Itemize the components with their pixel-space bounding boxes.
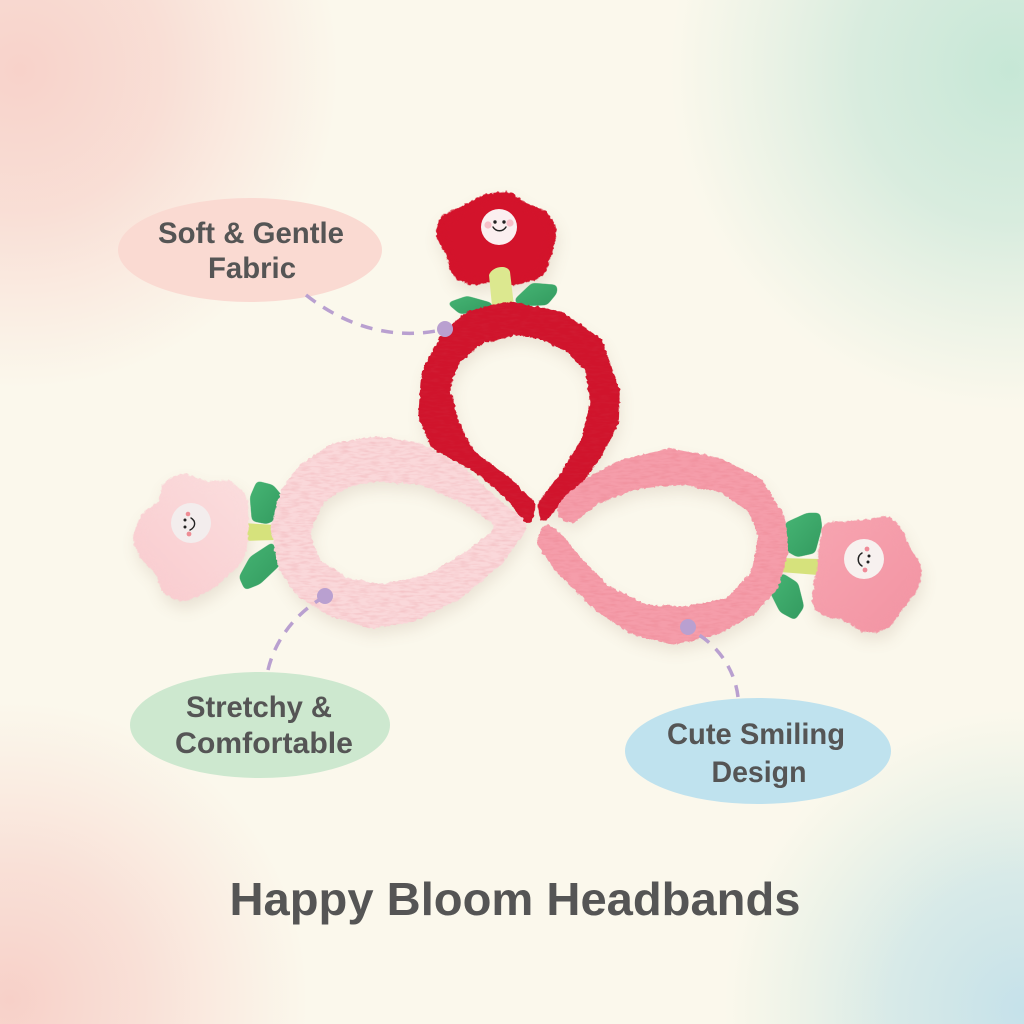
headband: salmon pink (right): [538, 450, 787, 643]
pink label text: Soft & Gentle: [158, 217, 344, 250]
red stem: [489, 267, 514, 306]
blue label pill: [625, 698, 891, 804]
flower: light pink with smiling face: [133, 473, 283, 602]
light pink stem: [242, 523, 276, 541]
headband: light pink (left): [272, 438, 525, 627]
pink connector dot: [437, 321, 453, 337]
title: Happy Bloom Headbands: [230, 873, 800, 925]
flower: red with smiling face: [436, 192, 557, 314]
salmon leaves: [770, 513, 822, 620]
pink label pill: [118, 198, 382, 302]
soft shadows under headbands: [135, 200, 924, 651]
green connector: [268, 600, 319, 670]
salmon stem: [780, 558, 820, 575]
green label text: Stretchy &: [186, 691, 332, 724]
flower: salmon pink with smiling face: [770, 513, 922, 632]
pink connector: [306, 295, 436, 333]
light pink petals: [133, 473, 248, 602]
headband: red (top): [420, 303, 618, 522]
blue connector: [694, 632, 738, 697]
blue connector dot: [680, 619, 696, 635]
blue label text: Design: [712, 756, 806, 789]
red face: [481, 209, 517, 245]
green connector dot: [317, 588, 333, 604]
green label text: Comfortable: [175, 727, 353, 760]
green label pill: [130, 672, 390, 778]
salmon face: [844, 539, 884, 579]
callout: stretchy and comfortable: [130, 588, 390, 778]
light pink face: [171, 503, 211, 543]
callout: soft and gentle fabric: [118, 198, 453, 337]
pink label text: Fabric: [208, 252, 296, 285]
red petals: [436, 192, 557, 285]
blue label text: Cute Smiling: [667, 718, 845, 751]
light pink leaves: [239, 481, 283, 590]
callout: cute smiling design: [625, 619, 891, 804]
red leaves: [447, 283, 557, 314]
salmon petals: [812, 515, 922, 632]
